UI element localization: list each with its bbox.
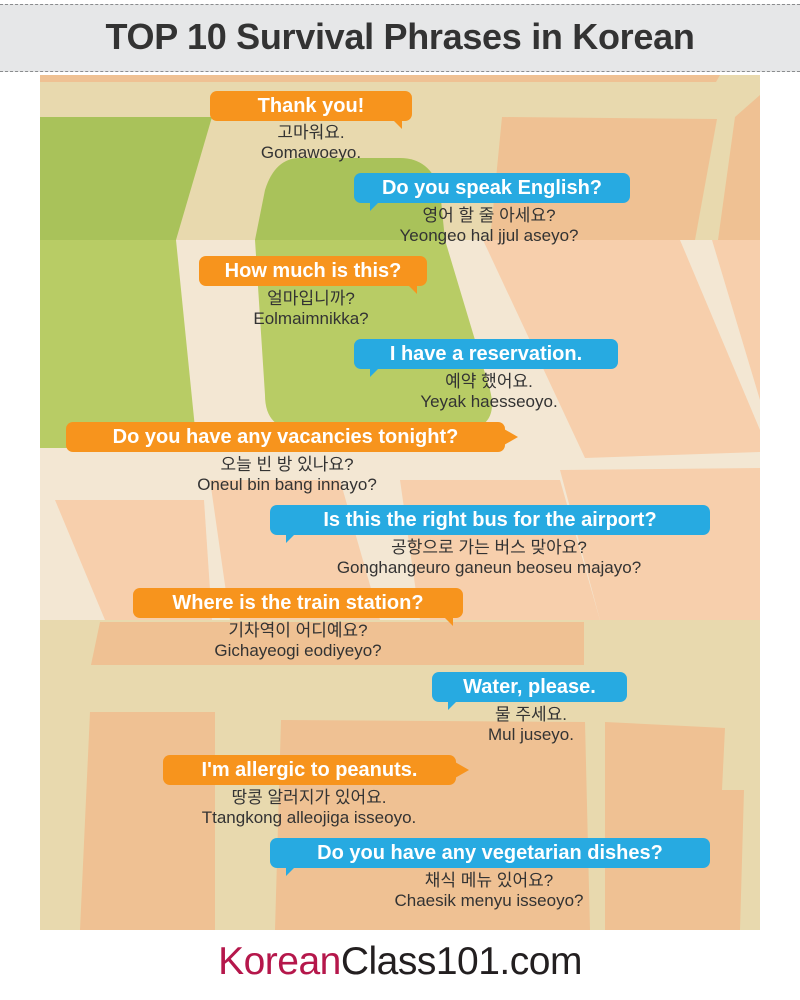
phrase 7: 기차역이 어디예요? xyxy=(228,621,368,640)
phrase 1: 고마워요. xyxy=(277,123,345,142)
bubble 9 xyxy=(163,755,456,785)
bubble 10 xyxy=(270,838,710,868)
phrase 4: 예약 했어요. xyxy=(445,372,533,391)
title bar xyxy=(0,4,800,72)
bubble 7 xyxy=(133,588,463,618)
phrase 1: Gomawoeyo. xyxy=(261,143,361,162)
phrase 9: 땅콩 알러지가 있어요. xyxy=(232,788,386,807)
bubble 5 xyxy=(66,422,505,452)
phrase 10: 채식 메뉴 있어요? xyxy=(425,871,553,890)
phrase 6 xyxy=(337,538,641,577)
phrase 8 xyxy=(488,705,574,744)
title bar: TOP 10 Survival Phrases in Korean xyxy=(105,16,695,57)
bubble 8 xyxy=(432,672,627,702)
bubble 6 xyxy=(270,505,710,535)
bubble 2: Do you speak English? xyxy=(382,177,602,199)
phrase 4 xyxy=(420,372,558,411)
bubble 4: I have a reservation. xyxy=(390,343,582,365)
bubble 1 xyxy=(210,91,412,121)
bubble 8: Water, please. xyxy=(463,676,596,698)
bubble 5: Do you have any vacancies tonight? xyxy=(113,426,458,448)
phrase 2: 영어 할 줄 아세요? xyxy=(422,206,556,225)
map background xyxy=(40,75,760,930)
phrase 3: 얼마입니까? xyxy=(267,289,355,308)
bubble 3 xyxy=(199,256,427,286)
phrase 6: Gonghangeuro ganeun beoseu majayo? xyxy=(337,558,641,577)
phrase 9: Ttangkong alleojiga isseoyo. xyxy=(202,808,416,827)
bubble 4 xyxy=(354,339,618,369)
bubble 3: How much is this? xyxy=(225,260,401,282)
phrase 6: 공항으로 가는 버스 맞아요? xyxy=(391,538,587,557)
bubble 9: I'm allergic to peanuts. xyxy=(202,759,417,781)
phrase 3 xyxy=(253,289,369,328)
phrase 8: Mul juseyo. xyxy=(488,725,574,744)
phrase 7: Gichayeogi eodiyeyo? xyxy=(214,641,382,660)
phrase 5 xyxy=(197,455,377,494)
phrase 5: Oneul bin bang innayo? xyxy=(197,475,377,494)
phrase 5: 오늘 빈 방 있나요? xyxy=(220,455,354,474)
phrase 3: Eolmaimnikka? xyxy=(253,309,369,328)
phrase 2: Yeongeo hal jjul aseyo? xyxy=(400,226,578,245)
phrase 10 xyxy=(394,871,583,910)
bubble 7: Where is the train station? xyxy=(172,592,424,614)
footer logo: KoreanClass101.com xyxy=(218,940,582,983)
bubble 10: Do you have any vegetarian dishes? xyxy=(317,842,663,864)
phrase 2 xyxy=(400,206,578,245)
phrase 4: Yeyak haesseoyo. xyxy=(420,392,558,411)
phrase 8: 물 주세요. xyxy=(495,705,567,724)
bubble 6: Is this the right bus for the airport? xyxy=(323,509,657,531)
phrase 9 xyxy=(202,788,416,827)
bubble 2 xyxy=(354,173,630,203)
phrase 1 xyxy=(261,123,361,162)
phrase 7 xyxy=(214,621,382,660)
bubble 1: Thank you! xyxy=(258,95,364,117)
phrase 10: Chaesik menyu isseoyo? xyxy=(394,891,583,910)
